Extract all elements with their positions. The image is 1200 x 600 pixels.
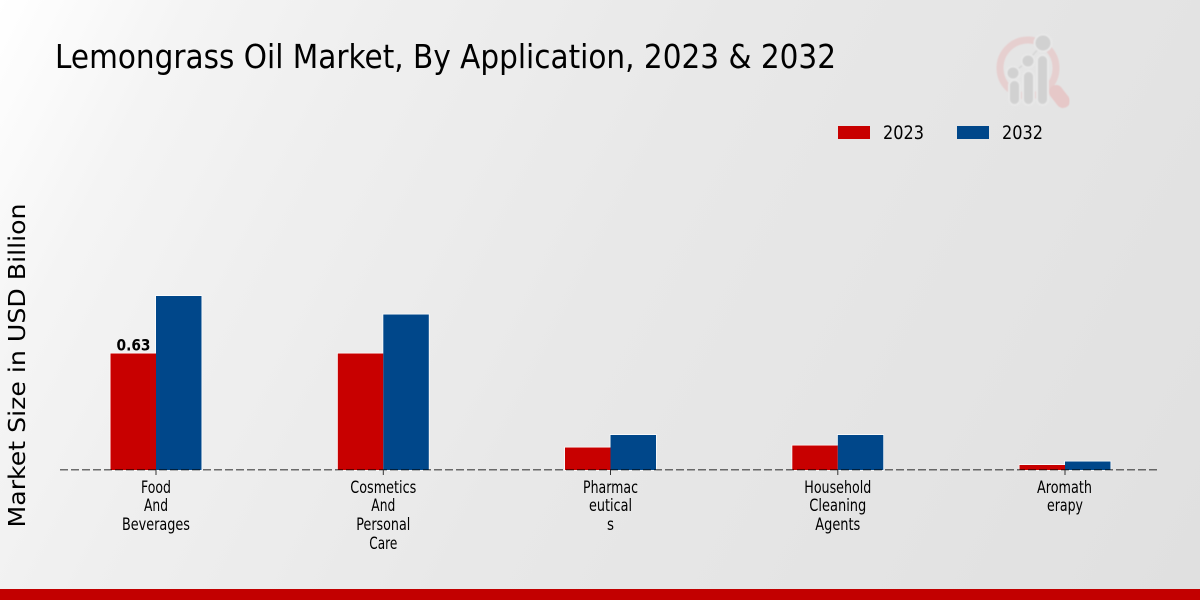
- category label: Household Cleaning Agents: [804, 478, 871, 534]
- category label: Cosmetics And Personal Care: And: [371, 496, 395, 515]
- category label: Aromatherapy: Aromath: [1037, 478, 1092, 497]
- category label: Food And Beverages: [122, 478, 190, 534]
- bars: Food And Beverages: [110, 296, 202, 470]
- value label: 0.63: [116, 336, 150, 355]
- category label: Pharmaceuticals: eutical: [589, 496, 632, 515]
- bars: Household Cleaning Agents: [792, 435, 883, 470]
- category label: Cosmetics And Personal Care: Personal: [356, 515, 410, 534]
- category label: Aromatherapy: erapy: [1047, 496, 1083, 515]
- category label: Pharmaceuticals: [583, 478, 638, 534]
- category label: Food And Beverages: Food: [141, 478, 171, 497]
- category label: Household Cleaning Agents: Agents: [815, 515, 860, 534]
- category label: Pharmaceuticals: Pharmac: [583, 478, 638, 497]
- category label: Cosmetics And Personal Care: Cosmetics: [350, 478, 416, 497]
- category label: Household Cleaning Agents: Cleaning: [809, 496, 866, 515]
- legend item: 2032: 2032: [1002, 122, 1043, 144]
- icon: watermark logo: [1000, 34, 1063, 105]
- legend item: 2023: [838, 122, 924, 144]
- category label: Cosmetics And Personal Care: [350, 478, 416, 553]
- category label: Food And Beverages: Beverages: [122, 515, 190, 534]
- bars: Pharmaceuticals: [565, 435, 656, 470]
- legend item: 2032: [957, 122, 1043, 144]
- category label: Aromatherapy: [1037, 478, 1092, 515]
- footer bar: [0, 589, 1200, 600]
- title: Lemongrass Oil Market, By Application, 2023 & 2032: [55, 37, 836, 76]
- y axis label: Market Size in USD Billion: [3, 204, 31, 528]
- category label: Pharmaceuticals: s: [607, 515, 614, 534]
- category label: Cosmetics And Personal Care: Care: [369, 534, 397, 553]
- baseline: [60, 469, 1160, 471]
- bar chart: [60, 296, 1160, 475]
- category label: Household Cleaning Agents: Household: [804, 478, 871, 497]
- legend item: 2023: 2023: [883, 122, 924, 144]
- legend: [838, 122, 1043, 144]
- bars: Cosmetics And Personal Care: [338, 314, 429, 470]
- category label: Food And Beverages: And: [144, 496, 168, 515]
- bars: Aromatherapy: [1020, 462, 1110, 470]
